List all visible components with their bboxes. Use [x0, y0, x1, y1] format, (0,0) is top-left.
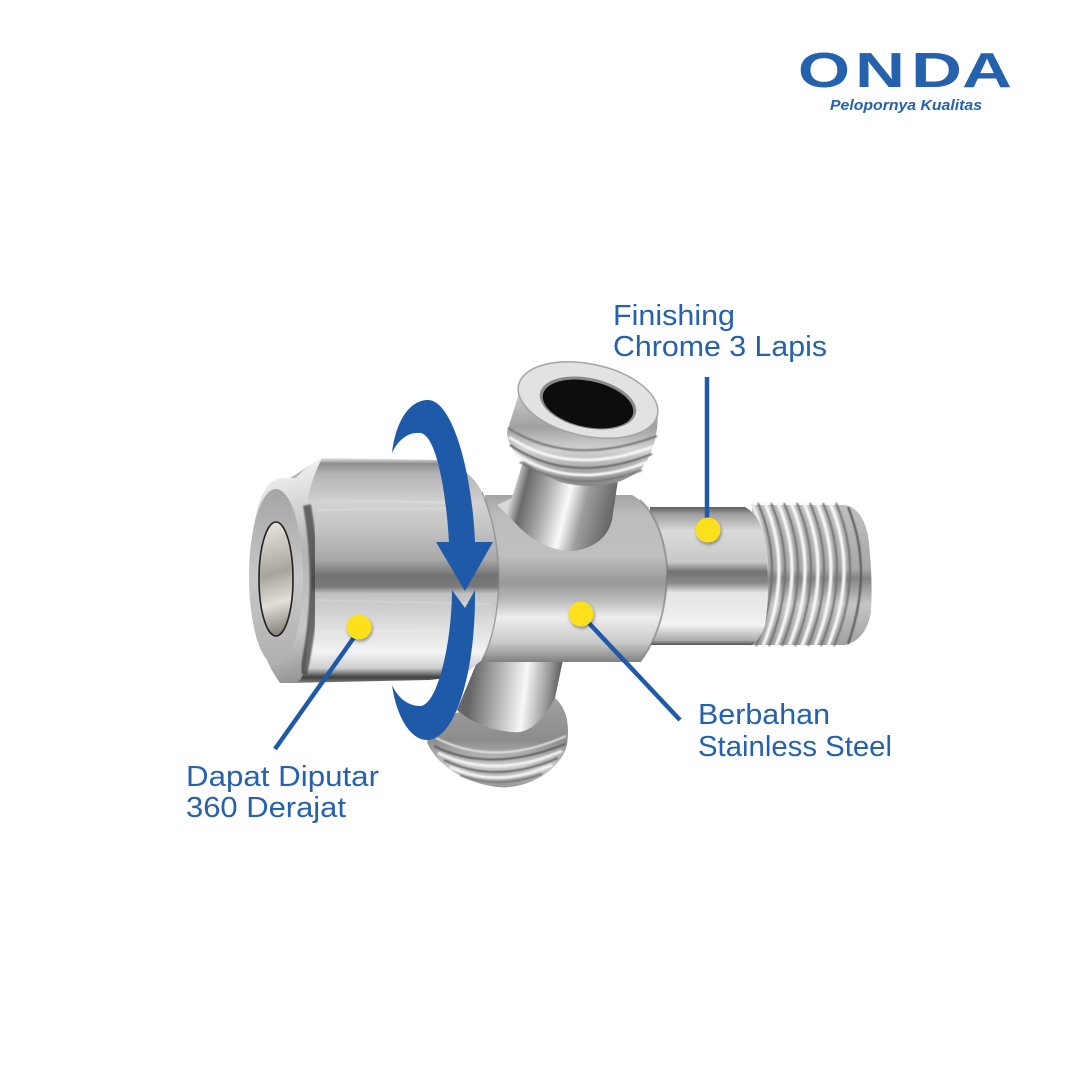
- callout: rotates 360 degrees: [186, 614, 379, 824]
- handle cap button: [259, 522, 293, 636]
- logo: ONDA: N: [855, 44, 905, 98]
- callout: finishing chrome: Finishing: [613, 300, 735, 332]
- valve illustration: [249, 350, 872, 787]
- callout: finishing chrome: [613, 300, 827, 542]
- top outlet pipe and nut: [497, 350, 665, 551]
- logo: ONDA: Pelopornya Kualitas: [830, 97, 982, 114]
- callout: rotates 360 degrees: Dapat Diputar: [186, 761, 379, 793]
- handle cap ring: [249, 458, 322, 683]
- callout: stainless steel: Stainless Steel: [698, 731, 892, 763]
- rotating handle: [249, 458, 499, 683]
- callout: stainless steel: Berbahan: [698, 699, 830, 731]
- central body: [485, 495, 667, 662]
- logo: ONDA: [798, 44, 1012, 114]
- logo: ONDA: D: [911, 44, 962, 98]
- barrel: [650, 507, 768, 645]
- bottom outlet pipe and nut: [427, 655, 568, 787]
- logo: ONDA: O: [798, 44, 850, 98]
- callout: stainless steel: [568, 602, 892, 763]
- callout: finishing chrome: Chrome 3 Lapis: [613, 331, 827, 363]
- logo: ONDA: A: [962, 44, 1012, 98]
- threaded male end: [750, 503, 872, 646]
- callout: rotates 360 degrees: 360 Derajat: [186, 792, 346, 824]
- rotation arrow: [392, 400, 493, 740]
